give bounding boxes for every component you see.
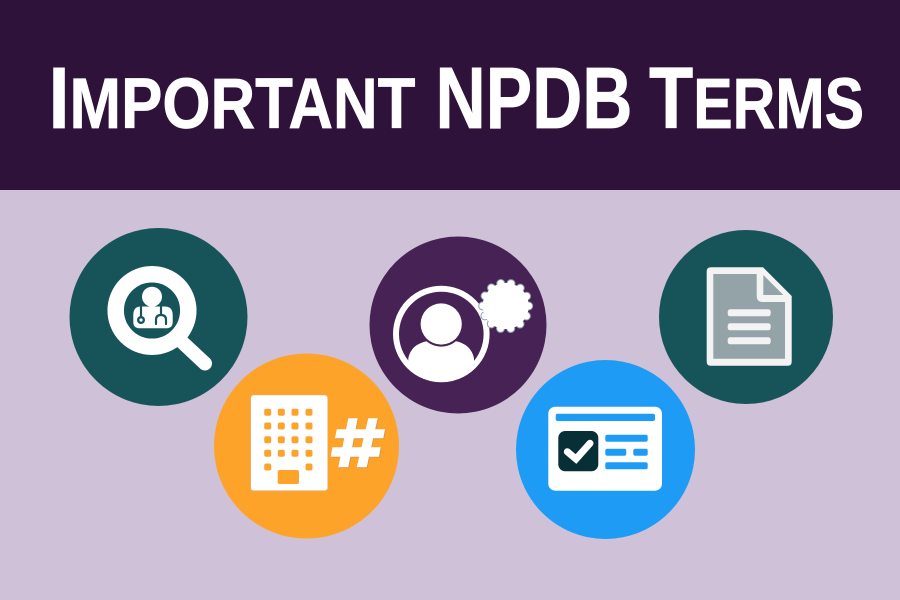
title: IMPORTANT [48, 50, 416, 147]
header banner [0, 0, 900, 190]
icon: ID card with check on blue circle [516, 360, 695, 539]
icon: building number on orange circle [214, 354, 399, 538]
title: NPDB [436, 50, 632, 147]
title: TERMS [649, 50, 864, 147]
icon: person with seal on purple circle [370, 236, 546, 414]
icon: document on teal circle [659, 230, 833, 404]
icon: doctor search on teal circle [70, 228, 248, 406]
title [48, 50, 864, 147]
